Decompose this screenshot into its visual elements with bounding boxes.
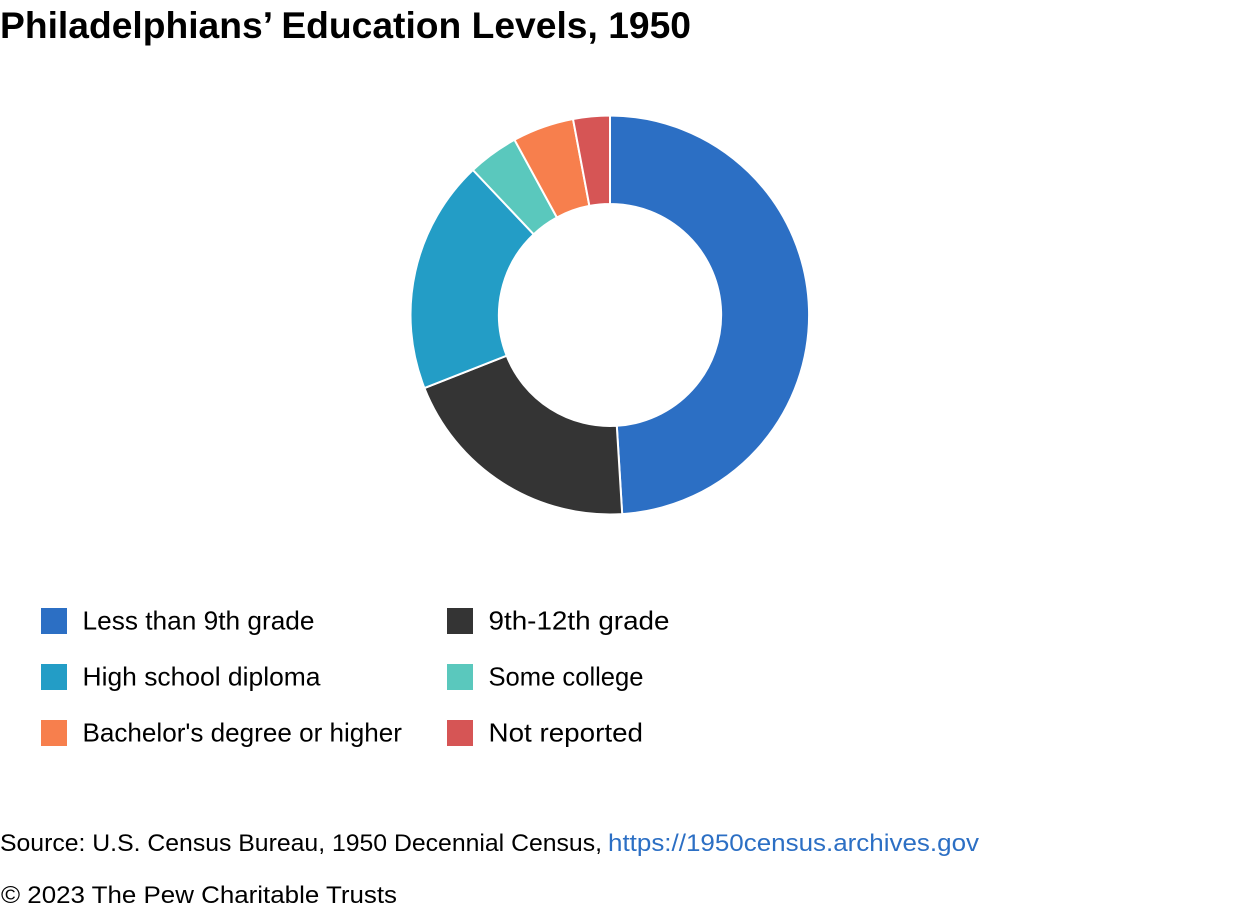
segment: high school diploma [410, 170, 534, 388]
legend item: some college: Some college [488, 662, 644, 692]
legend item: less than 9th grade: Less than 9th grade [82, 606, 314, 636]
segment: bachelor's degree or higher [514, 119, 589, 218]
legend item: high school diploma: High school diploma [82, 662, 321, 692]
legend item: not reported: Not reported [488, 718, 643, 748]
legend item: 9th-12th grade: 9th-12th grade [488, 606, 670, 636]
segment: some college [473, 140, 557, 234]
segment: not reported [573, 116, 610, 206]
donut chart [410, 116, 809, 514]
source line: Source: U.S. Census Bureau, 1950 Decennial Census, [0, 830, 602, 857]
legend item: bachelor's degree or higher: Bachelor's degree or higher [82, 718, 402, 748]
segment: 9th-12th grade [424, 356, 622, 514]
source line [0, 830, 980, 857]
copyright: © 2023 The Pew Charitable Trusts [1, 882, 397, 909]
segment: less than 9th grade [610, 116, 809, 514]
title: Philadelphians’ Education Levels, 1950 [0, 5, 691, 46]
legend [41, 606, 670, 748]
source link: https://1950census.archives.gov [608, 830, 980, 857]
